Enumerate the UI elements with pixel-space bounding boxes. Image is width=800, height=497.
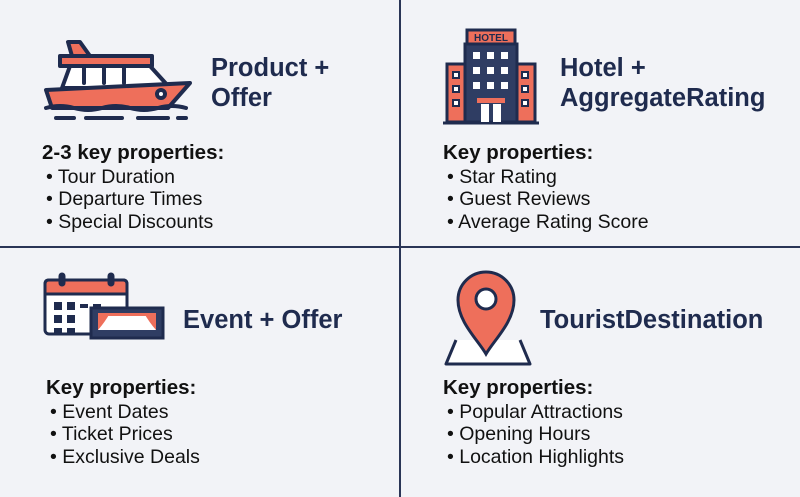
title: Product + Offer xyxy=(211,54,329,112)
text: properties 2 xyxy=(443,141,649,232)
text: properties 4: • Opening Hours xyxy=(447,423,590,445)
text: properties 1: 2-3 key properties: xyxy=(42,141,224,164)
text: properties 3: • Ticket Prices xyxy=(50,423,173,445)
text: properties 4: Key properties: xyxy=(443,376,593,399)
title: TouristDestination: TouristDestination xyxy=(540,306,763,334)
icon: calendar & stage xyxy=(44,272,164,340)
icon: hotel xyxy=(443,28,539,124)
title: Hotel + AggregateRating: AggregateRating xyxy=(560,84,765,112)
icon: boat xyxy=(44,40,192,120)
text: properties 4 xyxy=(443,376,624,468)
text: properties 1: • Tour Duration xyxy=(46,166,175,188)
title: Product + Offer: Product + xyxy=(211,54,329,82)
icon: location pin xyxy=(444,270,532,366)
text: properties 3: • Exclusive Deals xyxy=(50,446,200,468)
title: Event + Offer: Event + Offer xyxy=(183,306,342,334)
text: properties 1 xyxy=(42,141,224,232)
title: Product + Offer: Offer xyxy=(211,84,272,112)
text: properties 3: • Event Dates xyxy=(50,400,168,422)
text: properties 2: • Guest Reviews xyxy=(447,188,590,210)
text: properties 4: • Location Highlights xyxy=(447,446,624,468)
text: properties 2: • Average Rating Score xyxy=(447,210,649,232)
icon: hotel: HOTEL xyxy=(474,33,508,44)
text: properties 1: • Special Discounts xyxy=(46,210,213,232)
text: properties 3 xyxy=(46,376,200,468)
text: properties 1: • Departure Times xyxy=(46,188,202,210)
title: Hotel + AggregateRating xyxy=(560,54,765,112)
title: Hotel + AggregateRating: Hotel + xyxy=(560,54,646,82)
text: properties 4: • Popular Attractions xyxy=(447,400,623,422)
text: properties 3: Key properties: xyxy=(46,376,196,399)
text: properties 2: Key properties: xyxy=(443,141,593,164)
text: properties 2: • Star Rating xyxy=(447,166,557,188)
